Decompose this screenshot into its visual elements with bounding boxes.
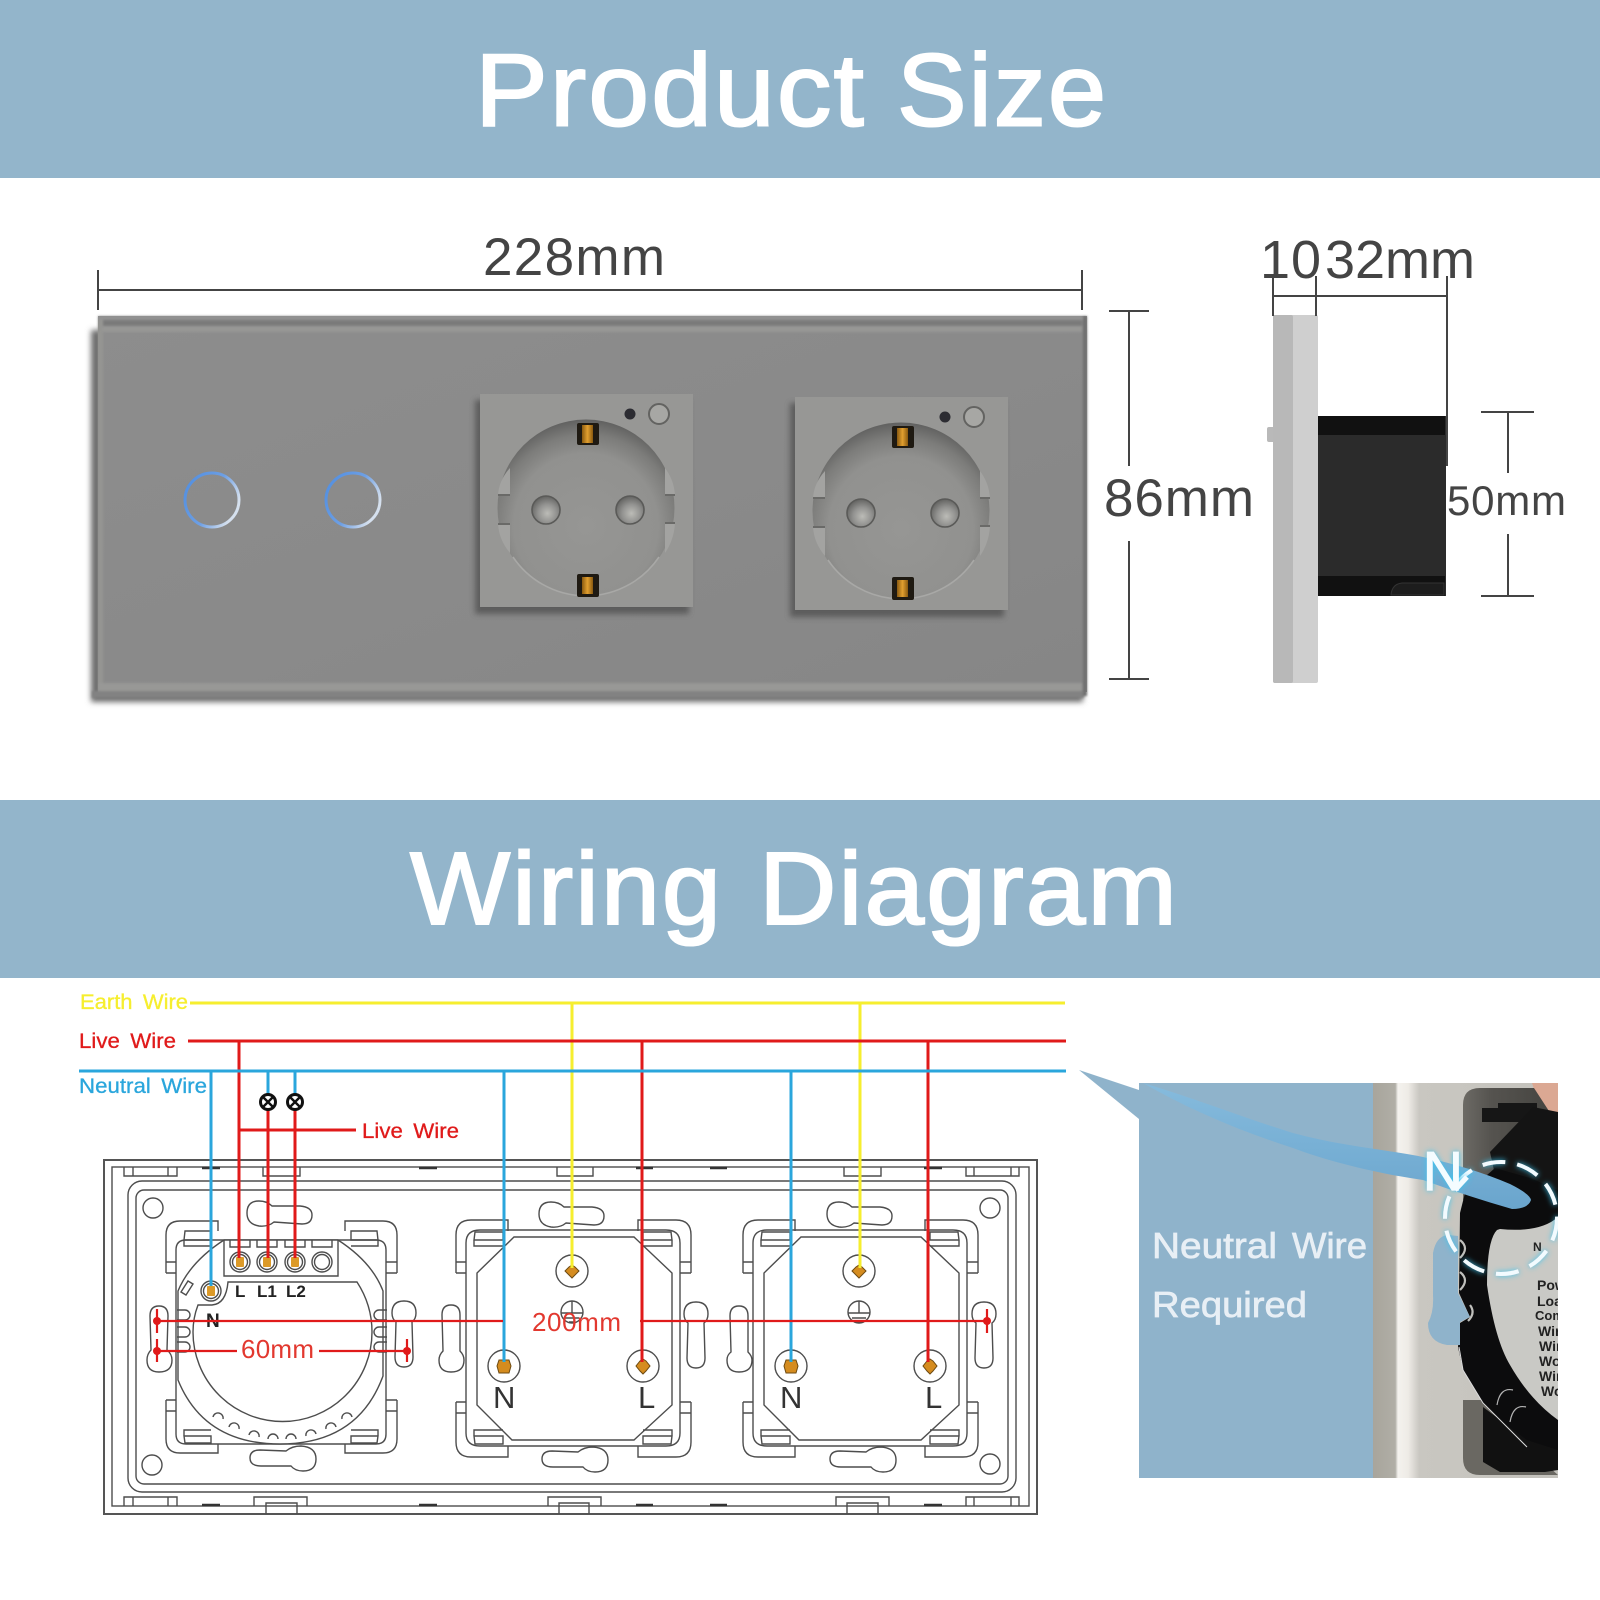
touch button 1 bbox=[185, 473, 239, 527]
terminals L L1 L2 N bbox=[201, 1252, 332, 1301]
black bracket and body bbox=[1482, 1103, 1537, 1122]
label text on module: Wo bbox=[1539, 1353, 1561, 1369]
width dimension 228mm: 228mm bbox=[483, 228, 665, 287]
height dimension 86mm bbox=[1104, 311, 1254, 679]
title: Product Size bbox=[475, 32, 1108, 148]
dashed highlight circle bbox=[1445, 1162, 1557, 1274]
width dimension 228mm bbox=[98, 228, 1082, 310]
label text on module bbox=[1534, 1242, 1558, 1396]
socket 2 labels: N bbox=[780, 1380, 802, 1415]
box height dimension 50mm: 50mm bbox=[1447, 477, 1566, 524]
terminal labels: L bbox=[235, 1282, 245, 1301]
depth dimension 10 / 32mm bbox=[1260, 230, 1475, 466]
title: Wiring Diagram bbox=[410, 831, 1179, 946]
wire labels: Live Wire bbox=[362, 1120, 459, 1143]
dimension 60mm: 60mm bbox=[241, 1334, 314, 1364]
blue cut-out bbox=[1428, 1235, 1470, 1345]
lamp 1 bbox=[260, 1094, 276, 1110]
label text on module: Wir bbox=[1539, 1368, 1562, 1384]
dimension 200mm bbox=[153, 1307, 991, 1337]
wiring diagram: touch switch module bbox=[166, 1221, 397, 1453]
mounting slots bbox=[147, 1201, 996, 1472]
terminal labels bbox=[206, 1282, 306, 1332]
title: Product Size: Size bbox=[897, 32, 1108, 148]
title: Wiring Diagram: Wiring bbox=[410, 831, 723, 946]
depth dimension 10 / 32mm: 0 bbox=[1291, 230, 1321, 290]
depth dimension 10 / 32mm: 1 bbox=[1260, 230, 1290, 290]
terminal labels: L1 bbox=[257, 1282, 277, 1301]
side view of switch bbox=[1267, 315, 1446, 683]
socket 1 labels: N bbox=[493, 1380, 515, 1415]
title: Product Size: Product bbox=[475, 32, 866, 148]
callout text bbox=[1152, 1225, 1367, 1325]
label text on module: Loa bbox=[1537, 1293, 1562, 1309]
socket 1 labels bbox=[493, 1380, 655, 1415]
wire labels: Live Wire bbox=[79, 1030, 176, 1053]
socket 2 bbox=[790, 397, 1008, 617]
neutral wire bbox=[1143, 1083, 1531, 1209]
label text on module: Wir bbox=[1538, 1323, 1561, 1339]
socket 1 bbox=[475, 394, 693, 614]
dimension 200mm: 200mm bbox=[532, 1307, 621, 1337]
callout pointer bbox=[1079, 1070, 1139, 1119]
title: Wiring Diagram: Diagram bbox=[759, 831, 1179, 946]
panel: front view of glass switch panel bbox=[91, 316, 1087, 702]
callout: neutral wire required bbox=[1079, 1070, 1566, 1478]
heading band: Product Size bbox=[0, 0, 1600, 178]
heading band: Wiring Diagram bbox=[0, 800, 1600, 978]
wiring diagram: mounting plate bbox=[104, 1160, 1037, 1514]
terminal labels: N bbox=[206, 1311, 220, 1332]
callout text: Required bbox=[1152, 1284, 1307, 1325]
depth dimension 10 / 32mm: 32mm bbox=[1325, 230, 1475, 290]
wall plate bbox=[1463, 1088, 1558, 1200]
lamp 2 bbox=[288, 1094, 302, 1110]
wire labels bbox=[79, 991, 459, 1143]
wire labels: Earth Wire bbox=[80, 991, 188, 1014]
box height dimension 50mm bbox=[1447, 412, 1566, 596]
wire labels: Neutral Wire bbox=[79, 1075, 207, 1098]
callout panel bbox=[1139, 1083, 1373, 1478]
wiring diagram: socket module 2 bbox=[743, 1220, 978, 1457]
wiring diagram: socket module 1 bbox=[456, 1220, 691, 1457]
label text on module: Wo bbox=[1541, 1383, 1563, 1399]
label text on module: Pow bbox=[1537, 1277, 1566, 1293]
height dimension 86mm: 86mm bbox=[1104, 469, 1254, 528]
dimension 60mm bbox=[153, 1334, 411, 1364]
silver label bbox=[1487, 1217, 1558, 1420]
callout text: Neutral bbox=[1152, 1225, 1277, 1266]
photo: neutral wire in module bbox=[1373, 1083, 1566, 1478]
socket 1 labels: L bbox=[638, 1380, 655, 1415]
socket 2 labels bbox=[780, 1380, 942, 1415]
label text on module: Com bbox=[1535, 1308, 1564, 1323]
touch button 2 bbox=[326, 473, 380, 527]
wires bbox=[79, 1003, 1066, 1362]
callout text: Wire bbox=[1292, 1225, 1367, 1266]
label text on module: Wir bbox=[1539, 1338, 1562, 1354]
N marker: N bbox=[1423, 1140, 1463, 1202]
terminal labels: L2 bbox=[286, 1282, 306, 1301]
socket 2 labels: L bbox=[925, 1380, 942, 1415]
label text on module: N bbox=[1533, 1240, 1542, 1254]
